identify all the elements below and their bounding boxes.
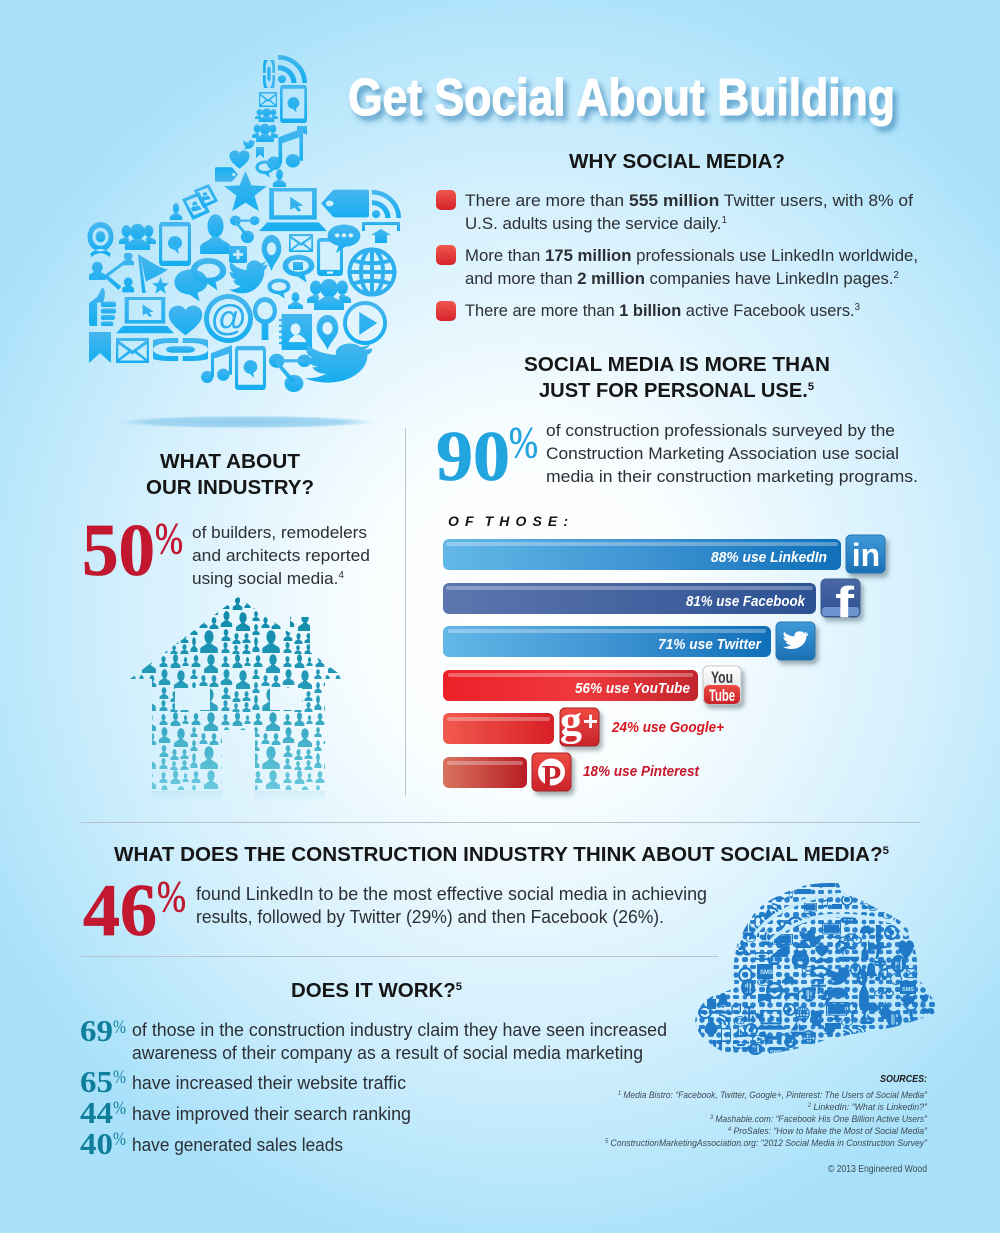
brim [717, 993, 729, 1008]
stat: 90%: 90 [436, 418, 510, 496]
copyright: © 2013 Engineered Wood [828, 1164, 927, 1175]
bar: YouTube 56%: You [711, 668, 733, 687]
title: Get Social About Building [348, 69, 895, 127]
icon: house made of people [130, 597, 340, 798]
stat: 90%: media in their construction marketing programs. [546, 467, 918, 486]
icon: thumbs-up collage of social icons [88, 54, 401, 429]
bar: Google+ 24%: g [560, 699, 582, 745]
second band [788, 916, 803, 930]
heading: more than personal use [524, 354, 830, 402]
stat: 69%: 69 [80, 1013, 113, 1048]
stat: 50%: 4 [338, 570, 344, 581]
bar: LinkedIn 88%: 88% use LinkedIn [711, 549, 827, 566]
heading: more than personal use: 5 [808, 381, 814, 393]
bar: YouTube 56% [443, 666, 741, 705]
sources [605, 1074, 928, 1149]
bar: YouTube 56%: Tube [709, 686, 735, 705]
sources: Media Bistro: “Facebook, Twitter, Google+, Pinterest: The Users of Social Media” [621, 1090, 928, 1101]
sources: 2 [807, 1103, 812, 1109]
sources: SOURCES: [880, 1074, 927, 1085]
stat: 65% [80, 1064, 406, 1099]
icon: hard hat made of icons: SMS [770, 1050, 782, 1056]
icon: thumbs-up collage of social icons: @ [211, 297, 246, 338]
bar: YouTube 56%: 56% use YouTube [575, 680, 690, 697]
sources: ProSales: “How to Make the Most of Social Media” [731, 1126, 928, 1137]
icon: hard hat made of icons: @ [733, 1013, 746, 1028]
stat: 44%: % [113, 1098, 126, 1119]
bullet list: and more than 2 million companies have LinkedIn pages. [465, 269, 898, 288]
heading: does it work: DOES IT WORK? [291, 980, 452, 1002]
stat: 46%: 46 [83, 870, 157, 952]
sources: 5 [605, 1139, 609, 1145]
outer band [771, 896, 785, 900]
stat: 46%: results, followed by Twitter (29%) and then Facebook (26%). [196, 907, 664, 927]
bar: Facebook 81% [443, 578, 860, 627]
bullet list: 3 [855, 302, 860, 313]
label: of those: O F T H O S E : [448, 513, 568, 529]
bar chart: social network use [443, 535, 885, 794]
bullet list: U.S. adults using the service daily. [465, 214, 724, 233]
bullet list [436, 190, 918, 321]
stat: 65%: have increased their website traffic [132, 1073, 406, 1093]
bar: Google+ 24%: 24% use Google+ [611, 719, 724, 736]
stat: 50%: % [155, 514, 183, 563]
icon: hard hat made of icons: SMS [902, 987, 914, 993]
heading: more than personal use: JUST FOR PERSONAL USE. [539, 380, 806, 402]
stat: 40%: 40 [80, 1126, 113, 1161]
stat: 50% [82, 510, 370, 592]
stat: 44%: have improved their search ranking [132, 1104, 411, 1124]
stat: 40% [80, 1126, 343, 1161]
sources: LinkedIn: “What is Linkedin?” [811, 1102, 928, 1113]
icon: hard hat made of icons [690, 880, 940, 1060]
bar: Twitter 71% [443, 622, 815, 660]
stat: 40%: % [113, 1129, 126, 1150]
stat: 90%: Construction Marketing Association use social [546, 444, 899, 463]
panel: why social media [436, 151, 918, 321]
stat: 46% [83, 870, 707, 952]
sources: ConstructionMarketingAssociation.org: “2012 Social Media in Construction Survey” [608, 1138, 928, 1149]
stat: 50%: of builders, remodelers [192, 523, 367, 542]
bar: Pinterest 18%: P [542, 758, 561, 794]
bullet list: More than 175 million professionals use LinkedIn worldwide, [465, 246, 918, 265]
bullet list: There are more than 555 million Twitter users, with 8% of [465, 191, 913, 210]
icon: hard hat made of icons: SMS [760, 970, 773, 976]
stat: 44% [80, 1095, 411, 1130]
stat: 40%: have generated sales leads [132, 1135, 343, 1155]
stat: 90%: of construction professionals surveyed by the [546, 421, 895, 440]
sources: 3 [710, 1115, 714, 1121]
crown [761, 930, 773, 945]
stat: 50%: using social media. [192, 569, 337, 588]
stat: 46%: % [157, 872, 186, 921]
bar: Twitter 71%: 71% use Twitter [658, 636, 762, 653]
bullet list: 1 [721, 215, 727, 226]
bar: Pinterest 18%: 18% use Pinterest [583, 763, 700, 780]
heading: what about our industry: OUR INDUSTRY? [146, 477, 314, 499]
stat: 90%: % [509, 418, 538, 467]
bullet list: 2 [894, 270, 899, 281]
stat: 44%: 44 [80, 1095, 113, 1130]
stat: 69%: of those in the construction industry claim they have seen increased [132, 1020, 667, 1040]
heading: what about our industry [146, 451, 314, 499]
bar: Facebook 81%: f [835, 578, 854, 627]
bar: Facebook 81%: 81% use Facebook [686, 593, 806, 610]
heading: what does the construction industry think: 5 [883, 845, 889, 857]
bullet list: There are more than 1 billion active Facebook users. [465, 301, 861, 320]
sources: 4 [728, 1127, 732, 1133]
crown ridges [755, 894, 860, 934]
panel: what about our industry [82, 451, 370, 804]
stat: 50%: and architects reported [192, 546, 370, 565]
heading: what does the construction industry think: WHAT DOES THE CONSTRUCTION INDUSTRY THINK ABOUT SOCIAL MEDIA? [114, 844, 859, 866]
stat: 50%: 50 [82, 510, 155, 592]
bar: Google+ 24% [443, 699, 724, 746]
stat: 69% [80, 1013, 667, 1063]
SMS box [757, 964, 773, 982]
bar: LinkedIn 88%: in [852, 537, 880, 573]
heading: more than personal use: SOCIAL MEDIA IS MORE THAN [524, 354, 830, 376]
bar: LinkedIn 88% [443, 535, 885, 573]
panel: more than personal use [436, 354, 918, 794]
stat: 46%: found LinkedIn to be the most effective social media in achieving [196, 884, 707, 904]
panel: does it work [80, 980, 667, 1161]
heading: why social media: WHY SOCIAL MEDIA? [569, 151, 785, 173]
heading: does it work: 5 [456, 981, 462, 993]
heading: what about our industry: WHAT ABOUT [160, 451, 300, 473]
sources: 1 [618, 1091, 621, 1097]
stat: 90% [436, 418, 918, 496]
sources: Mashable.com: “Facebook His One Billion Active Users” [713, 1114, 928, 1125]
bar: Google+ 24%: + [583, 706, 598, 736]
bar: Pinterest 18% [443, 753, 700, 794]
stat: 65%: 65 [80, 1064, 113, 1099]
stat: 69%: awareness of their company as a result of social media marketing [132, 1043, 643, 1063]
stat: 69%: % [113, 1017, 126, 1038]
stat: 65%: % [113, 1067, 126, 1088]
